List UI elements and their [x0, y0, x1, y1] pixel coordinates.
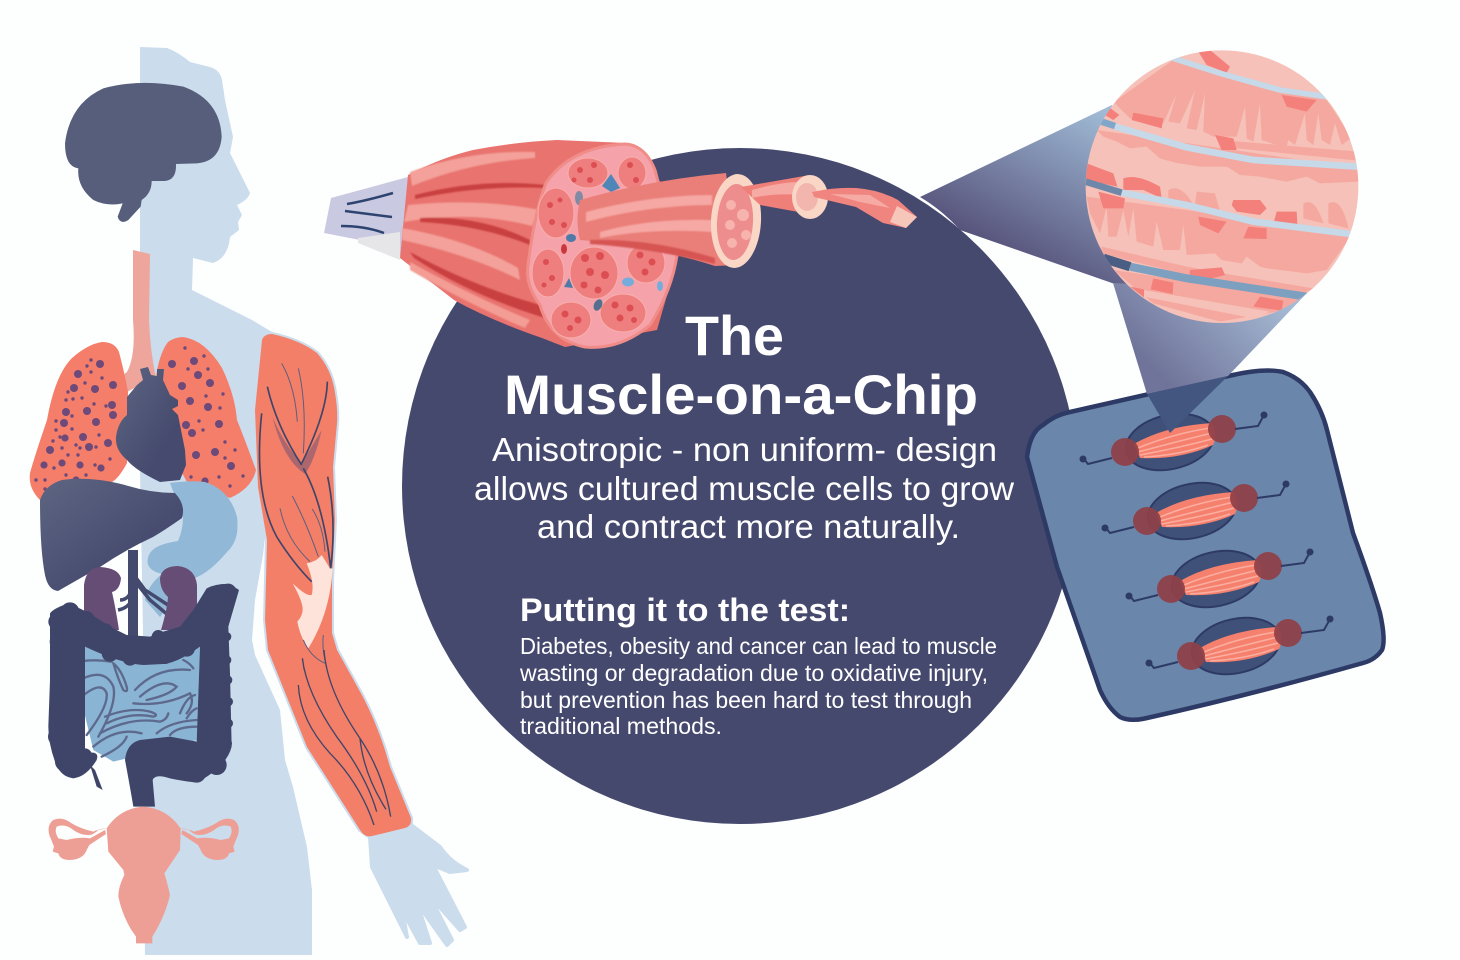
device 3 — [1126, 543, 1314, 615]
shoulder shading — [272, 417, 322, 474]
muscle belly — [400, 140, 678, 347]
muscle illustration — [324, 140, 917, 347]
arm outline and hand — [255, 334, 467, 945]
upper arm detail — [259, 363, 333, 670]
tendon — [324, 177, 408, 260]
section body text — [519, 633, 997, 739]
title — [504, 304, 978, 426]
large intestine — [48, 584, 239, 807]
kidney: right — [160, 566, 197, 630]
panel: lab chip — [1027, 371, 1384, 720]
trachea — [124, 250, 156, 392]
cone to magnified circle — [920, 105, 1132, 290]
myofibril — [812, 188, 917, 228]
fascicle dots — [542, 162, 656, 331]
title: The — [685, 304, 784, 367]
cross section — [528, 144, 677, 347]
subtitle — [474, 431, 1014, 545]
blue stripes — [1086, 58, 1358, 297]
arm muscles — [255, 334, 411, 836]
red sarcomere blocks — [1086, 50, 1317, 311]
section body text: traditional methods. — [520, 713, 722, 739]
title: Muscle-on-a-Chip — [504, 363, 978, 426]
lung: right — [155, 337, 256, 498]
lung: left — [30, 342, 128, 500]
stomach — [145, 481, 238, 617]
fibre bands — [1087, 60, 1358, 322]
small intestine — [80, 647, 200, 762]
uterus — [49, 807, 239, 943]
forearm muscle lines — [298, 650, 391, 825]
brain — [65, 83, 222, 222]
section body text: wasting or degradation due to oxidative injury, — [519, 660, 988, 686]
heart — [116, 367, 186, 482]
device 1 — [1080, 406, 1268, 478]
lower abdomen — [48, 584, 239, 943]
tendon highlight — [293, 555, 333, 648]
ovary and tube: right — [180, 819, 239, 860]
section body text: Diabetes, obesity and cancer can lead to muscle — [520, 633, 997, 659]
subtitle: and contract more naturally. — [537, 508, 960, 545]
section body text: but prevention has been hard to test through — [520, 687, 972, 713]
torso and head — [140, 47, 312, 955]
device 2 — [1102, 475, 1290, 547]
vessels — [118, 575, 168, 615]
upper arm muscle lines — [259, 382, 333, 582]
kidney: left — [84, 567, 121, 630]
fascicles — [532, 157, 665, 338]
section heading: Putting it to the test: — [520, 592, 850, 628]
body silhouette — [140, 47, 467, 955]
chip plate — [1027, 371, 1384, 720]
fibre — [741, 175, 828, 219]
ovary and tube: left — [49, 819, 107, 860]
device 4 — [1146, 610, 1334, 682]
fibre bundle — [578, 173, 763, 269]
blood vessels — [602, 174, 620, 192]
subtitle: Anisotropic - non uniform- design — [492, 431, 997, 468]
main circle — [402, 148, 1078, 824]
cone from chip to magnified circle — [1113, 283, 1307, 433]
subtitle: allows cultured muscle cells to grow — [474, 470, 1014, 507]
magnified muscle fibre circle — [1086, 50, 1358, 323]
liver — [40, 479, 183, 591]
